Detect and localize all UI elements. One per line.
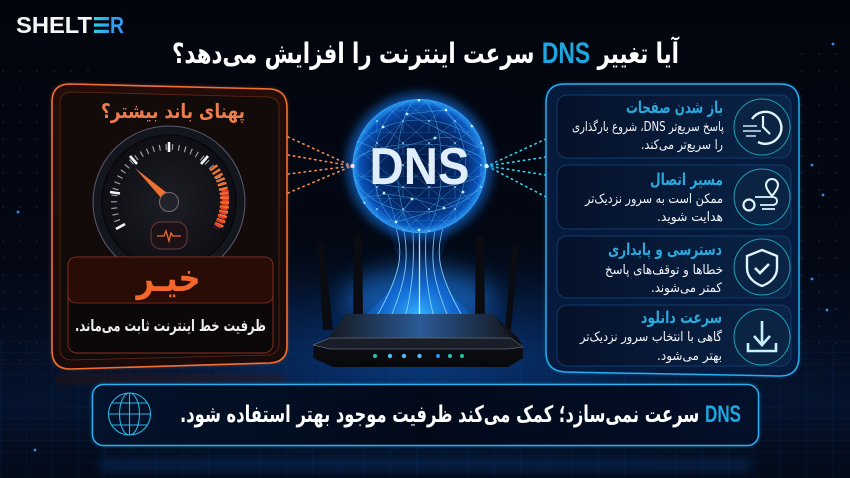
card text: ممکن است به سرور نزدیک‌تر (584, 192, 723, 207)
router beam (344, 225, 494, 332)
connector: dotted lines from left panel to globe (288, 137, 352, 193)
gauge (92, 126, 246, 256)
card: download (557, 305, 791, 366)
card heading: مسیر اتصال (650, 170, 723, 190)
callout bar (92, 384, 759, 446)
connector: dotted lines from right panel to globe (487, 139, 546, 197)
gauge hub (160, 192, 178, 212)
globe (346, 93, 492, 239)
panel: bandwidth (left) (52, 84, 287, 369)
card heading: سرعت دانلود (641, 308, 722, 328)
card text: گاهی با انتخاب سرور نزدیک‌تر (579, 329, 723, 345)
card text: هدایت شوید. (657, 210, 723, 225)
gauge pulse badge (151, 222, 187, 249)
card: route (557, 165, 791, 229)
card text (605, 263, 723, 296)
card text (572, 119, 724, 153)
icon: clock (734, 99, 790, 155)
card text (584, 192, 723, 225)
card text: پاسخ سریع‌تر DNS، شروع بارگذاری (572, 119, 724, 135)
router (313, 236, 523, 367)
panel heading: پهنای باند بیشتر؟ (101, 99, 245, 124)
gauge needle (135, 168, 167, 199)
logo: R (110, 12, 124, 38)
card heading: دسترسی و پایداری (608, 240, 722, 260)
router antennas (318, 236, 519, 330)
logo: SHELT (16, 12, 92, 38)
title: آیا تغییر DNS سرعت اینترنت را افزایش می‌دهد؟ (172, 36, 680, 70)
card: availability (557, 236, 791, 298)
globe network (352, 99, 487, 233)
router body (313, 314, 523, 367)
card text: کمتر می‌شوند. (651, 281, 723, 296)
answer note: ظرفیت خط اینترنت ثابت می‌ماند. (75, 316, 266, 335)
icon: shield (734, 239, 790, 295)
icon: route (734, 169, 790, 225)
card text: خطاها و توقف‌های پاسخ (605, 263, 723, 278)
panel: DNS benefits (right) (546, 84, 799, 376)
globe label: DNS (370, 138, 470, 196)
card text (579, 329, 723, 364)
answer box (68, 256, 273, 353)
card text: بهتر می‌شود. (657, 349, 722, 364)
icon: download (734, 309, 790, 365)
answer word: خیـر (135, 256, 200, 300)
card heading: باز شدن صفحات (626, 98, 723, 117)
icon: globe (108, 393, 150, 435)
router status lights (373, 354, 464, 358)
card: page loading (557, 95, 791, 158)
logo (16, 12, 124, 38)
card text: را سریع‌تر می‌کند. (641, 138, 723, 153)
